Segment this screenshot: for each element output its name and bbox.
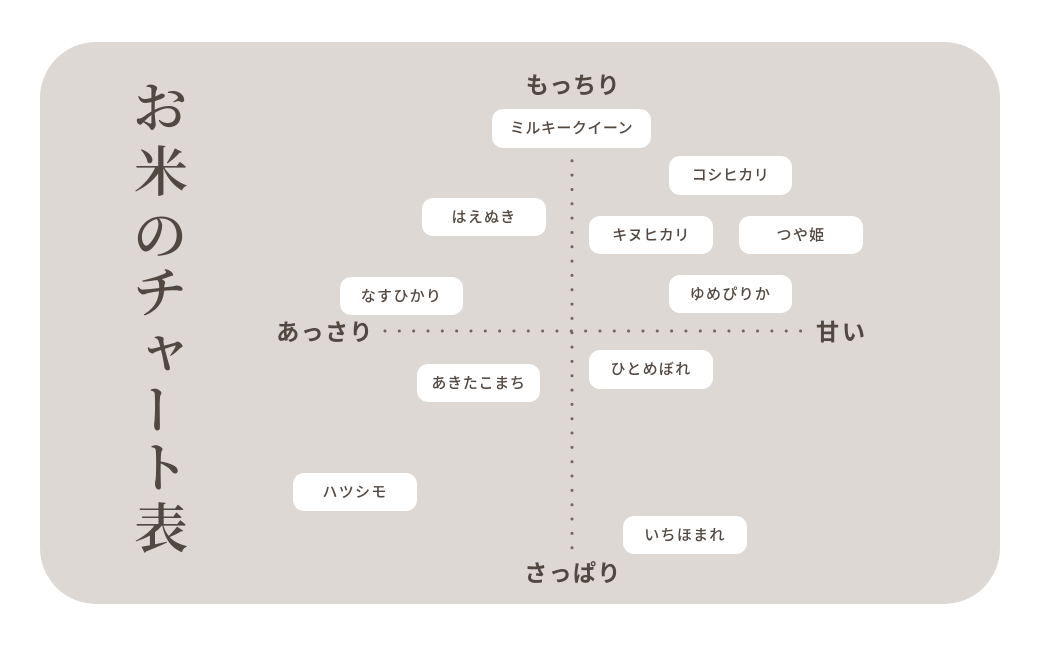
axis label: right: 甘い xyxy=(816,319,868,345)
label: ミルキークイーン xyxy=(492,109,651,148)
label: ミルキークイーン: ミルキークイーン xyxy=(510,120,633,137)
label: ハツシモ xyxy=(293,472,417,511)
axis label: left: あっさり xyxy=(276,319,374,345)
label: なすひかり: なすひかり xyxy=(361,288,442,304)
label: ゆめぴりか xyxy=(669,274,792,313)
label: ひとめぼれ: ひとめぼれ xyxy=(610,361,692,378)
label: はえぬき xyxy=(422,198,546,236)
title: vertical heading: 米 xyxy=(134,143,188,203)
label: コシヒカリ: コシヒカリ xyxy=(692,167,769,184)
title: vertical heading: チ xyxy=(133,264,187,324)
label: あきたこまち: あきたこまち xyxy=(431,374,526,392)
label: ひとめぼれ xyxy=(589,350,713,388)
label: いちほまれ xyxy=(623,516,747,554)
title: vertical heading: ャ xyxy=(138,319,192,379)
label: つや姫 xyxy=(739,216,863,254)
title: vertical heading: お xyxy=(133,79,187,139)
axis label: top: もっちり xyxy=(526,72,620,98)
label: ゆめぴりか: ゆめぴりか xyxy=(690,286,771,302)
title: vertical heading xyxy=(123,79,192,560)
label: キヌヒカリ xyxy=(589,216,713,254)
label: つや姫: つや姫 xyxy=(777,226,825,244)
label: はえぬき: はえぬき xyxy=(452,208,516,226)
label: キヌヒカリ: キヌヒカリ xyxy=(612,226,690,244)
label: あきたこまち xyxy=(417,364,540,402)
title: vertical heading: ト xyxy=(135,439,189,499)
label: ハツシモ: ハツシモ xyxy=(322,484,388,500)
label: いちほまれ: いちほまれ xyxy=(644,526,726,544)
axis label: bottom: さっぱり xyxy=(524,560,622,586)
title: vertical heading: 表 xyxy=(134,500,188,560)
title: vertical heading: ー xyxy=(123,382,183,436)
label: コシヒカリ xyxy=(669,156,792,194)
title: vertical heading: の xyxy=(133,207,187,267)
label: なすひかり xyxy=(340,276,463,315)
